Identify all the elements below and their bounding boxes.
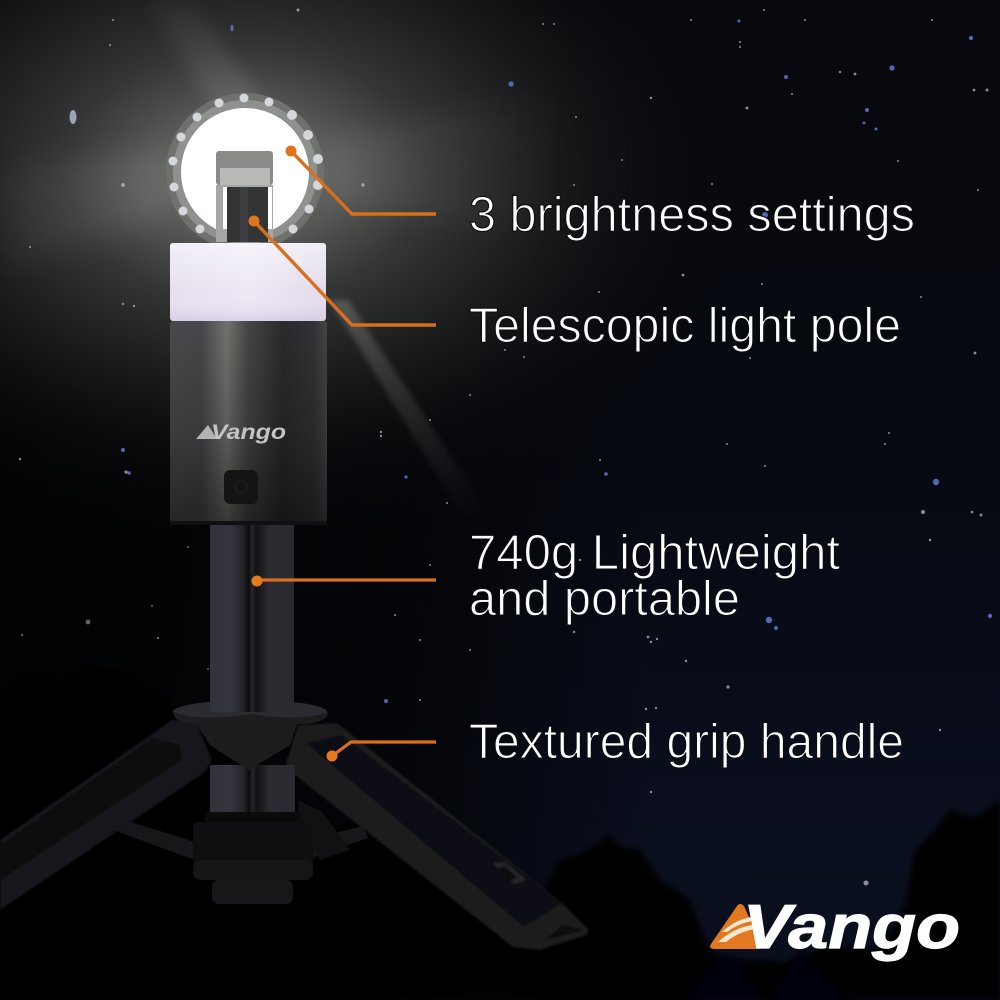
tripod collar and cone [173,698,328,770]
callout: grip line [326,742,436,762]
label: weight [469,526,840,626]
label: weight: 740g Lightweight [469,526,840,580]
tree silhouettes [0,665,1000,1000]
product: lantern on tripod [0,93,589,950]
label: weight: and portable [469,572,740,626]
label: brightness: 3 brightness settings [469,188,915,242]
lantern body [170,321,327,525]
brand logo: Vango [743,893,960,962]
bottom clamp [193,812,313,904]
label: telescopic pole: Telescopic light pole [469,299,901,353]
lantern ring light [166,93,324,251]
right tripod leg with textured grip [285,723,589,950]
callout: pole line [248,216,436,325]
power button [224,470,258,504]
light beams [0,0,560,520]
body logo: Vango [211,421,286,444]
callout: weight line [252,576,436,586]
left tripod leg [0,718,212,910]
callout: brightness line [286,146,436,214]
label: grip: Textured grip handle [469,715,904,769]
lantern diffuser [170,243,326,321]
telescopic pole [210,525,294,710]
tripod struts [114,800,368,862]
lower pole [210,765,295,817]
